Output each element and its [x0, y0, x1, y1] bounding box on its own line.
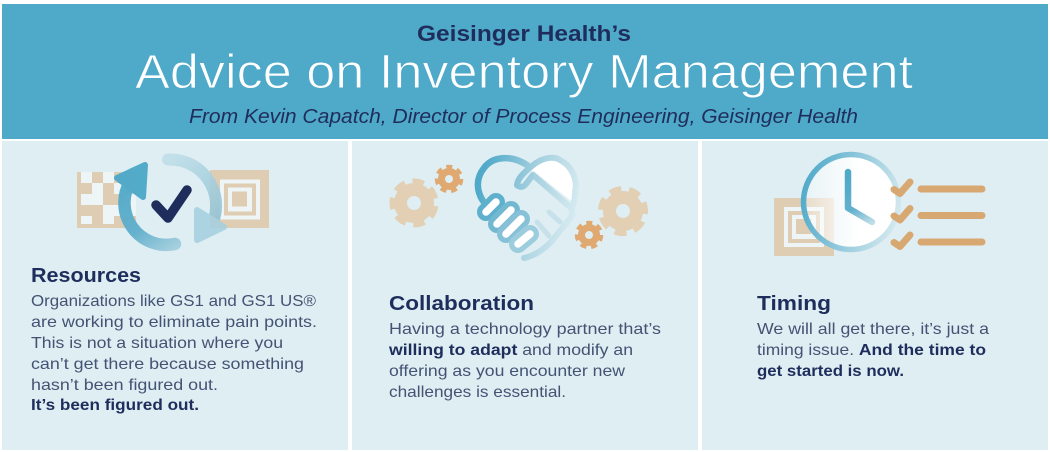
body text: collaboration [388, 321, 661, 401]
body text: resources: Organizations like GS1 and GS1 US® [31, 293, 316, 310]
clock hands [848, 172, 872, 222]
icon: square code [774, 198, 834, 256]
icon: handshake heart [478, 158, 576, 258]
handshake fingers [486, 202, 530, 244]
icon: gear small right [577, 223, 601, 247]
heading: resources: Resources [31, 264, 141, 287]
body text: collaboration: challenges is essential. [389, 384, 566, 401]
square code [210, 170, 269, 228]
panel: timing [702, 141, 1048, 450]
icon: barcode and refresh arrows with checkmark [77, 159, 269, 245]
body text: resources: can’t get there because something [31, 356, 304, 373]
refresh arrow right [168, 159, 224, 240]
body text: resources: are working to eliminate pain points. [31, 314, 317, 331]
header kicker: Geisinger Health’s [417, 21, 631, 46]
panel: collaboration [352, 141, 698, 450]
body text: timing [757, 321, 989, 380]
panel: resources [2, 141, 348, 450]
body text: collaboration: offering as you encounter new [389, 363, 625, 380]
refresh arrow left [117, 165, 175, 245]
icon: checklist [894, 182, 982, 246]
body text: timing: get started is now. [757, 363, 904, 380]
title: Advice on Inventory Management [135, 46, 913, 99]
body text: resources: This is not a situation where you [31, 335, 283, 352]
heading: collaboration: Collaboration [389, 292, 534, 315]
body text: resources [31, 293, 317, 414]
subtitle: From Kevin Capatch, Director of Process Engineering, Geisinger Health [189, 106, 858, 128]
body text: timing: We will all get there, it’s just a [757, 321, 989, 338]
icon: gear small left [437, 167, 461, 191]
icon: clock [804, 154, 898, 250]
body text: timing: timing issue. And the time to [757, 342, 986, 359]
icon: gear large left [390, 179, 438, 227]
body text: resources: hasn’t been figured out. [31, 377, 218, 394]
icon: gear large right [594, 182, 652, 240]
checkered code [77, 172, 136, 228]
heading: timing: Timing [757, 292, 831, 315]
header banner [2, 4, 1048, 139]
body text: collaboration: Having a technology partner that’s [389, 321, 661, 338]
body text: collaboration: willing to adapt and modify an [388, 342, 633, 359]
checkmark [156, 190, 187, 218]
body text: resources: It’s been figured out. [31, 397, 199, 414]
